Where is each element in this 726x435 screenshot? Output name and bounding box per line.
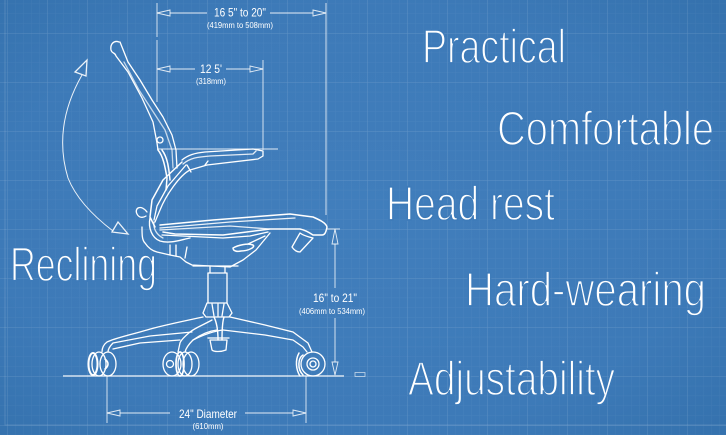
chair base legs <box>102 317 312 352</box>
feature: Practical: Practical <box>422 21 566 74</box>
chair casters <box>88 352 325 376</box>
ground line <box>63 375 344 377</box>
feature: Adjustability: Adjustability <box>408 353 615 406</box>
feature: Reclining: Reclining <box>10 239 157 292</box>
label: 12.5: 12 5' <box>200 62 222 76</box>
chair column and hub <box>193 266 238 352</box>
arrowhead: up <box>75 60 87 76</box>
label: 16.5 to 20: 16 5" to 20" <box>214 6 266 20</box>
chair armrest <box>150 149 263 227</box>
feature: Head rest: Head rest <box>386 178 555 231</box>
arrowhead: down <box>112 222 128 234</box>
small ground marker <box>355 372 365 376</box>
label: 610mm: (610mm) <box>192 422 224 431</box>
dimension: arm depth <box>157 60 278 150</box>
chair technical drawing <box>88 41 327 376</box>
label: 24 diameter: 24" Diameter <box>179 407 237 421</box>
dimension: base diameter <box>107 376 306 431</box>
label: 419mm to 508mm: (419mm to 508mm) <box>207 21 273 30</box>
dimension: seat height <box>299 229 365 375</box>
label: 318mm: (318mm) <box>196 77 226 86</box>
label: 16 to 21: 16" to 21" <box>313 291 357 305</box>
reclining rotation arrow <box>63 60 128 234</box>
chair seat <box>136 208 327 267</box>
label: 406mm to 534mm: (406mm to 534mm) <box>299 307 365 316</box>
chair backrest <box>111 41 177 190</box>
dimension: overall depth <box>157 3 326 215</box>
